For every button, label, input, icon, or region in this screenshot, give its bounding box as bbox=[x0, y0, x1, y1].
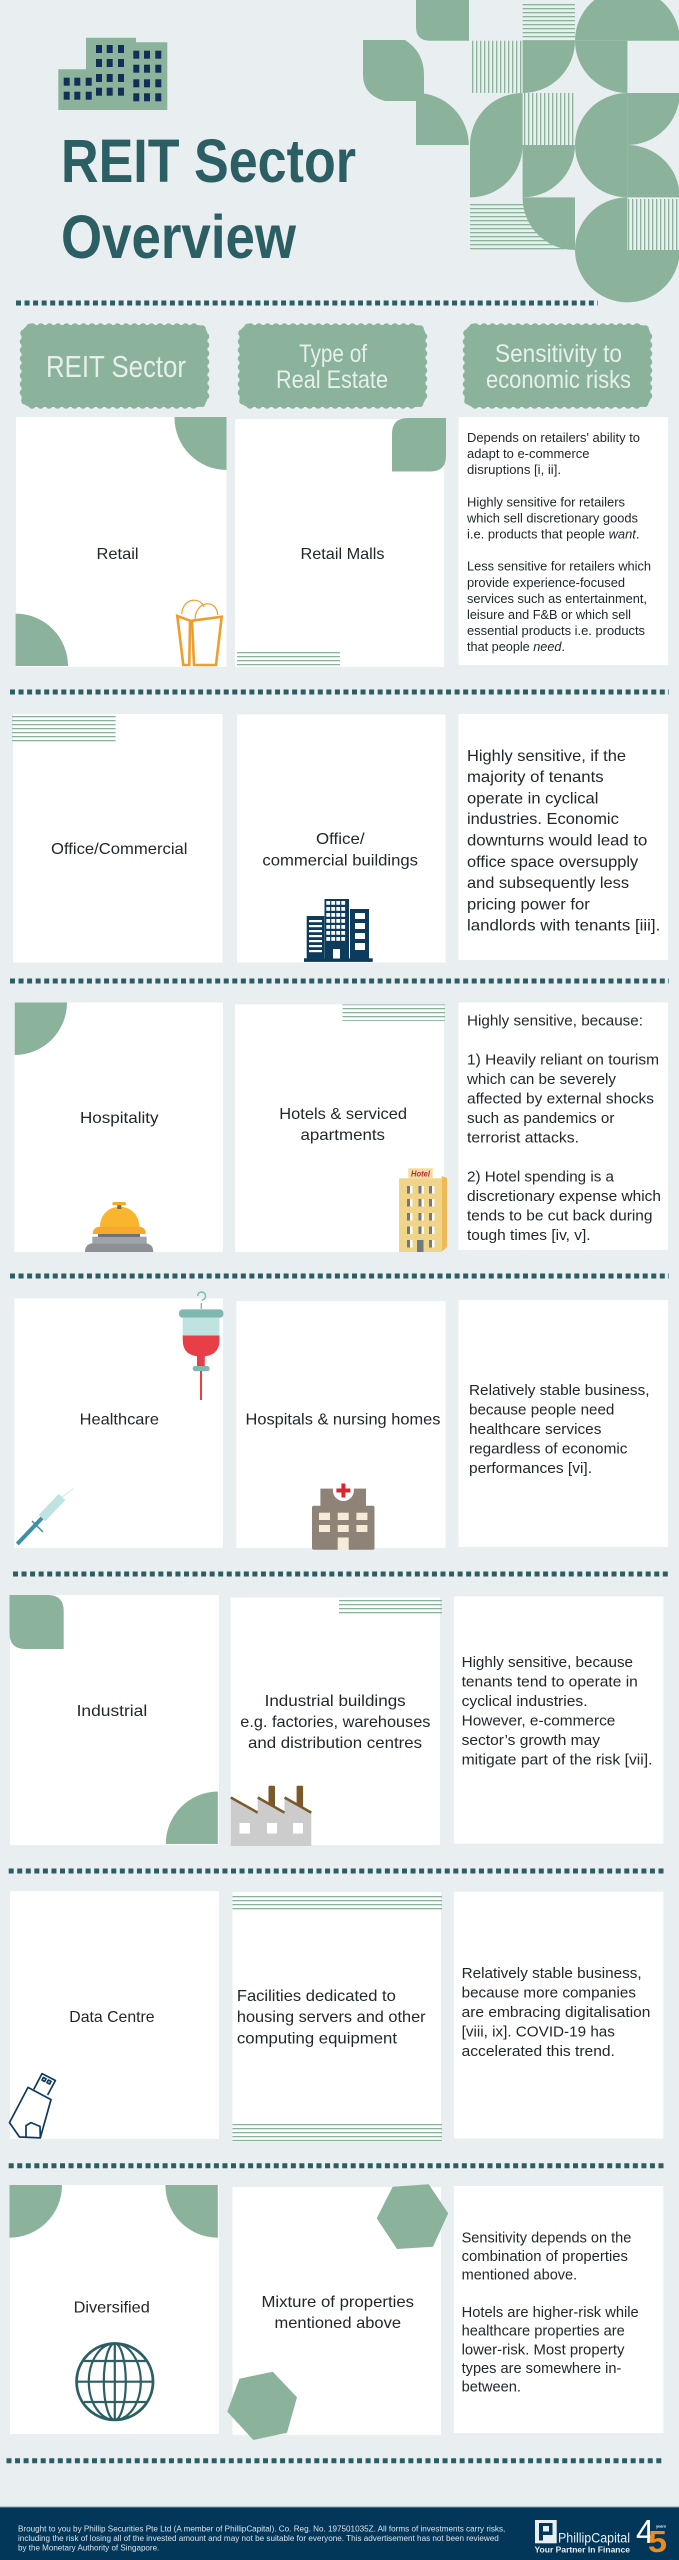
panel: Industrial buildings: and distribution centres bbox=[248, 1735, 422, 1752]
panel: Healthcare sensitivity: Relatively stable business, bbox=[469, 1382, 650, 1399]
logo: 45 years: 4 bbox=[636, 2513, 654, 2550]
panel: Mixture of properties: mentioned above bbox=[274, 2315, 401, 2332]
panel: Retail Malls bbox=[235, 418, 446, 667]
panel: Hotels & serviced apartments: Hotels & serviced bbox=[279, 1106, 407, 1123]
title: Overview bbox=[61, 203, 296, 271]
panel: Hospitality sensitivity bbox=[458, 1002, 668, 1250]
panel: Hospitals & nursing homes: Hospitals & nursing homes bbox=[246, 1412, 440, 1429]
panel: Data Centre sensitivity bbox=[454, 1892, 663, 2138]
panel: Facilities dedicated: Facilities dedicated to bbox=[237, 1988, 396, 2005]
panel: Industrial sensitivity: However, e-commerce bbox=[462, 1712, 615, 1729]
icon: service bell bbox=[85, 1202, 153, 1252]
panel: Mixture of properties: Mixture of properties bbox=[262, 2294, 414, 2311]
panel: Retail sensitivity: which sell discretionary goods bbox=[466, 510, 638, 526]
panel: Diversified sensitivity: between. bbox=[462, 2379, 521, 2396]
panel: Retail sensitivity: disruptions [i, ii]. bbox=[467, 462, 561, 477]
logo: PhillipCapital: PhillipCapital bbox=[558, 2529, 630, 2545]
panel: Hospitality sector bbox=[14, 1002, 223, 1252]
panel: Retail sensitivity: adapt to e-commerce bbox=[467, 446, 590, 461]
panel: Retail sector bbox=[16, 417, 226, 667]
icon: IV blood bag bbox=[179, 1292, 223, 1400]
panel: Industrial buildings: e.g. factories, warehouses bbox=[240, 1714, 430, 1731]
panel: Industrial sensitivity: sector’s growth may bbox=[462, 1732, 601, 1749]
panel: Office sensitivity bbox=[458, 714, 668, 960]
panel: Retail sensitivity bbox=[458, 417, 668, 665]
panel: Office sensitivity: pricing power for bbox=[467, 896, 590, 913]
icon: shopping bag bbox=[177, 600, 222, 665]
panel: Office sensitivity: industries. Economic bbox=[467, 811, 619, 828]
panel: Diversified sensitivity: types are somewhere in- bbox=[462, 2360, 621, 2377]
panel: Data Centre sector bbox=[10, 1891, 219, 2139]
panel: Office sensitivity: and subsequently less bbox=[467, 875, 629, 892]
panel: Retail sensitivity: that people need. bbox=[467, 639, 565, 654]
panel: Diversified sensitivity: combination of properties bbox=[462, 2248, 628, 2265]
panel: Mixture of properties bbox=[227, 2184, 448, 2440]
panel: Diversified sensitivity: Sensitivity depends on the bbox=[462, 2229, 631, 2246]
disclaimer text: by the Monetary Authority of Singapore. bbox=[18, 2542, 159, 2552]
panel: Hospitality sensitivity: tends to be cut back during bbox=[467, 1208, 652, 1225]
icon: office towers bbox=[304, 899, 373, 962]
panel: Data Centre sensitivity: [viii, ix]. COVID-19 has bbox=[462, 2024, 615, 2040]
panel: Office sensitivity: landlords with tenants [iii]. bbox=[467, 917, 660, 934]
panel: Data Centre sector: Data Centre bbox=[69, 2009, 155, 2026]
panel: Industrial buildings bbox=[231, 1598, 442, 1846]
panel: Retail sensitivity: i.e. products that people want. bbox=[467, 526, 640, 542]
panel: Retail sensitivity: Less sensitive for retailers which bbox=[467, 559, 651, 574]
panel: Hospitality sensitivity: 2) Hotel spending is a bbox=[467, 1169, 615, 1186]
panel: Office/commercial buildings: commercial buildings bbox=[262, 852, 418, 869]
disclaimer text bbox=[18, 2524, 505, 2552]
panel: Retail Malls: Retail Malls bbox=[300, 546, 384, 563]
heading badge: Type of Real Estate: Real Estate bbox=[276, 366, 388, 394]
panel: Hospitality sensitivity: affected by external shocks bbox=[467, 1091, 654, 1108]
heading badge: Type of Real Estate: Type of bbox=[299, 340, 367, 368]
icon: globe bbox=[77, 2344, 153, 2420]
panel: Data Centre sensitivity: are embracing digitalisation bbox=[462, 2004, 650, 2021]
panel: Healthcare sensitivity bbox=[458, 1300, 668, 1547]
heading badge: Sensitivity to economic risks: Sensitivity to bbox=[495, 340, 622, 368]
title: REIT Sector bbox=[61, 127, 356, 195]
panel: Industrial sensitivity: Highly sensitive, because bbox=[462, 1654, 633, 1671]
icon: hotel building: Hotel bbox=[411, 1170, 431, 1178]
panel: Diversified sector: Diversified bbox=[74, 2299, 150, 2316]
panel: Hospitality sensitivity: which can be severely bbox=[466, 1071, 617, 1088]
panel: Diversified sensitivity: Hotels are higher-risk while bbox=[462, 2304, 639, 2321]
title bbox=[61, 127, 356, 271]
panel: Hotels & serviced apartments: apartments bbox=[300, 1127, 385, 1144]
panel: Retail sensitivity: leisure and F&B or which sell bbox=[467, 607, 631, 622]
panel: Hotels & serviced apartments bbox=[235, 1004, 447, 1252]
icon: USB drive bbox=[10, 2074, 55, 2138]
panel: Healthcare sector bbox=[14, 1292, 223, 1548]
panel: Healthcare sector: Healthcare bbox=[80, 1412, 159, 1429]
disclaimer text: Brought to you by Phillip Securities Pte Ltd (A member of PhillipCapital). Co. Reg. No. 197501035Z. All forms of investments carry risks, bbox=[18, 2524, 505, 2534]
panel: Hospitality sensitivity: tough times [iv, v]. bbox=[467, 1227, 591, 1244]
panel: Healthcare sensitivity: regardless of economic bbox=[469, 1440, 628, 1457]
logo: 45 years: years bbox=[656, 2524, 666, 2528]
panel: Hospitality sensitivity: Highly sensitive, because: bbox=[467, 1012, 643, 1030]
icon: syringe bbox=[17, 1488, 74, 1544]
icon: factory bbox=[231, 1786, 311, 1846]
panel: Office/commercial buildings bbox=[237, 714, 446, 962]
panel: Hospitality sensitivity: such as pandemics or bbox=[467, 1110, 614, 1127]
icon: hotel building bbox=[399, 1168, 447, 1252]
panel: Industrial sector bbox=[10, 1595, 219, 1845]
panel: Data Centre sensitivity: accelerated this trend. bbox=[462, 2043, 615, 2060]
panel: Hospitality sensitivity: 1) Heavily reliant on tourism bbox=[467, 1052, 659, 1068]
heading badge: REIT Sector: REIT Sector bbox=[46, 349, 186, 384]
panel: Industrial sector: Industrial bbox=[77, 1703, 147, 1720]
panel: Facilities dedicated: computing equipment bbox=[237, 2030, 398, 2047]
panel: Hospitals & nursing homes bbox=[236, 1301, 446, 1550]
panel: Hospitality sensitivity: discretionary expense which bbox=[467, 1188, 661, 1205]
panel: Industrial sensitivity: mitigate part of the risk [vii]. bbox=[462, 1751, 652, 1768]
panel: Office/commercial buildings: Office/ bbox=[316, 831, 365, 848]
logo: PhillipCapital bbox=[534, 2520, 631, 2554]
panel: Retail sensitivity: Highly sensitive for retailers bbox=[467, 494, 625, 509]
panel: Retail sensitivity: services such as entertainment, bbox=[467, 591, 647, 606]
footer band bbox=[0, 2506, 679, 2560]
panel: Diversified sector bbox=[10, 2185, 219, 2434]
heading badge: Sensitivity to economic risks: economic risks bbox=[486, 366, 631, 394]
panel: Industrial sensitivity: cyclical industries. bbox=[462, 1693, 588, 1710]
heading badge: Type of Real Estate bbox=[240, 325, 426, 407]
panel: Office sensitivity: downturns would lead to bbox=[467, 832, 647, 850]
panel: Industrial sensitivity: tenants tend to operate in bbox=[462, 1673, 638, 1690]
disclaimer text: including the risk of losing all of the invested amount and may not be suitable for everyone. This advertisement has not been reviewed bbox=[18, 2533, 499, 2543]
panel: Diversified sensitivity bbox=[454, 2186, 663, 2433]
panel: Industrial sensitivity bbox=[454, 1596, 663, 1844]
panel: Hospitality sensitivity: terrorist attacks. bbox=[467, 1130, 579, 1147]
panel: Facilities dedicated bbox=[232, 1892, 442, 2141]
panel: Data Centre sensitivity: Relatively stable business, bbox=[462, 1965, 642, 1982]
panel: Diversified sensitivity: healthcare properties are bbox=[462, 2323, 625, 2340]
panel: Healthcare sensitivity: performances [vi]. bbox=[469, 1460, 592, 1477]
panel: Office sensitivity: operate in cyclical bbox=[467, 790, 598, 807]
decorative geometric pattern bbox=[363, 0, 679, 302]
panel: Retail sensitivity: provide experience-focused bbox=[467, 575, 625, 590]
heading badge: REIT Sector bbox=[22, 325, 208, 407]
panel: Healthcare sensitivity: healthcare services bbox=[469, 1421, 601, 1438]
panel: Data Centre sensitivity: because more companies bbox=[462, 1984, 636, 2001]
panel: Retail sensitivity: Depends on retailers' ability to bbox=[467, 430, 640, 445]
panel: Office/Commercial sector: Office/Commercial bbox=[51, 841, 188, 858]
logo: 45 years: 5 bbox=[648, 2524, 667, 2559]
panel: Diversified sensitivity: mentioned above. bbox=[462, 2267, 577, 2284]
panel: Office sensitivity: Highly sensitive, if the bbox=[467, 748, 626, 765]
panel: Healthcare sensitivity: because people need bbox=[469, 1401, 614, 1418]
panel: Office/Commercial sector bbox=[12, 714, 222, 963]
panel: Retail sector: Retail bbox=[96, 546, 138, 563]
icon: hospital bbox=[312, 1480, 374, 1550]
logo: PhillipCapital: Your Partner In Finance bbox=[534, 2545, 631, 2554]
panel: Retail sensitivity: essential products i.e. products bbox=[467, 623, 645, 638]
icon: header building bbox=[58, 38, 167, 110]
panel: Diversified sensitivity: lower-risk. Most property bbox=[462, 2341, 625, 2358]
logo: 45 years bbox=[636, 2513, 667, 2559]
panel: Office sensitivity: majority of tenants bbox=[467, 769, 604, 786]
panel: Hospitality sector: Hospitality bbox=[80, 1110, 158, 1127]
panel: Industrial buildings: Industrial buildings bbox=[265, 1693, 406, 1710]
heading badge: Sensitivity to economic risks bbox=[464, 325, 650, 407]
panel: Office sensitivity: office space oversupply bbox=[467, 854, 638, 871]
panel: Facilities dedicated: housing servers and other bbox=[237, 2009, 426, 2026]
